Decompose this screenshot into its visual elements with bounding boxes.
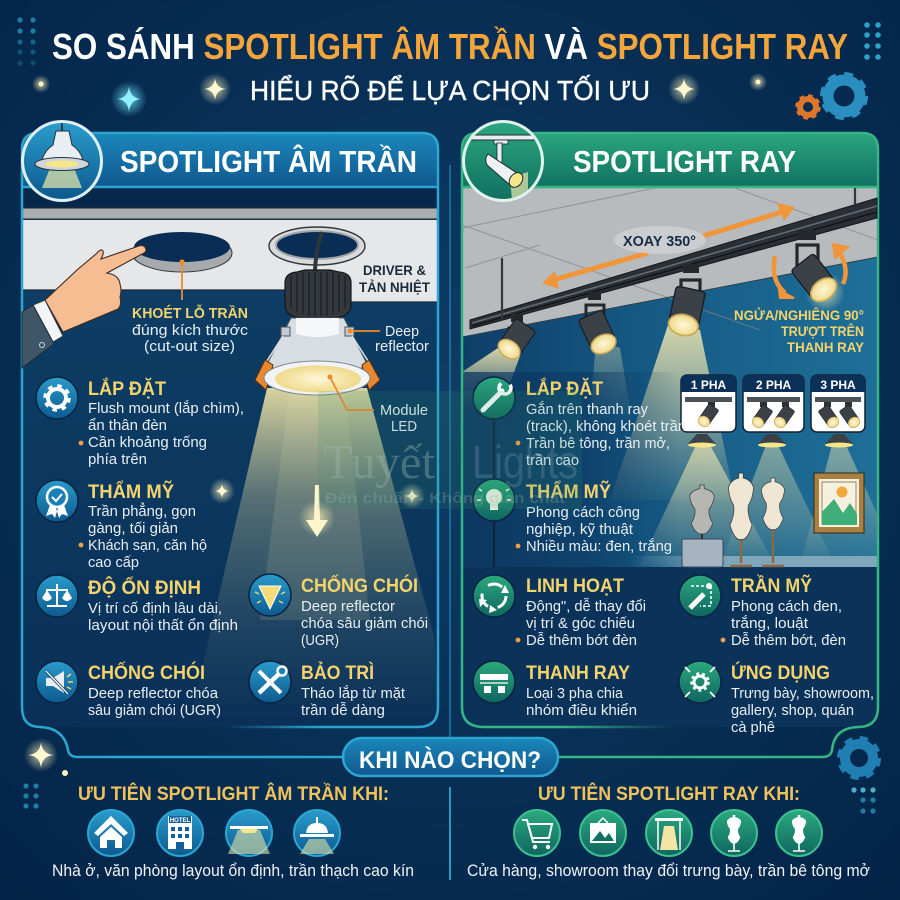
left features [36, 377, 428, 719]
feature: tham my: THẨM MỸ [88, 481, 174, 503]
feature: thanh ray: THANH RAY [526, 663, 630, 684]
bottom divider [449, 787, 451, 880]
track rail [470, 198, 877, 329]
heading: spotlight am tran: SPOTLIGHT ÂM TRẦN [120, 143, 417, 179]
feature: lap dat: Flush mount (lắp chìm), [88, 400, 244, 417]
framed picture [814, 466, 864, 533]
mannequin cream [728, 473, 754, 566]
watermark [318, 391, 582, 509]
feature: lap dat track: trần cao [526, 453, 579, 469]
card: 1 pha: 1 PHA [691, 378, 727, 392]
center divider [449, 165, 451, 740]
pendant lamps [688, 434, 853, 448]
panel: spotlight am tran [22, 133, 438, 757]
feature: ung dung: ỨNG DỤNG [731, 662, 830, 684]
feature: lap dat track: (track), không khoét trần [526, 419, 686, 435]
card: 1 pha [681, 375, 736, 432]
feature: thanh ray: nhóm điều khiển [526, 703, 637, 719]
lamp beam [190, 388, 438, 720]
feature: lap dat track [473, 377, 686, 469]
pedestal [682, 539, 723, 567]
icon: orange gear [797, 96, 819, 118]
card: 2 pha [743, 375, 804, 432]
feature: linh hoat: LINH HOẠT [526, 576, 624, 597]
icon: blue gear [823, 75, 865, 117]
callout: module led [328, 374, 428, 435]
decorative dots and sparkles top [17, 17, 881, 117]
subtitle: HIỂU RÕ ĐỂ LỰA CHỌN TỐI ƯU [250, 74, 650, 106]
feature: lap dat: ẩn thân đèn [88, 418, 167, 434]
feature: tham my: Khách sạn, căn hộ [88, 538, 207, 554]
icon: pointing hand [22, 246, 146, 368]
callout: cut-out size [132, 259, 248, 355]
phase cards [681, 375, 865, 432]
feature: tham my track: nghiệp, kỹ thuật [526, 522, 633, 538]
callout: driver [359, 262, 430, 295]
icon: house [88, 810, 134, 856]
feature: ung dung [679, 661, 874, 736]
heat sink driver [285, 270, 351, 318]
feature: bao tri: BẢO TRÌ [301, 662, 374, 684]
dark text backdrop [462, 372, 680, 567]
feature: linh hoat [473, 575, 646, 649]
feature: do on dinh: Vị trí cố định lâu dài, [88, 601, 222, 617]
arrows: tilt [774, 244, 848, 298]
card: 3 pha: 3 PHA [820, 378, 856, 392]
feature: chong choi right: (UGR) [301, 633, 339, 649]
pill: khi nao chon: KHI NÀO CHỌN? [359, 746, 541, 774]
feature: do on dinh: layout nội thất ổn định [88, 618, 238, 634]
watermark: Lights [472, 436, 578, 488]
spotlight three [667, 264, 706, 338]
callout: cut-out size: đúng kích thước [132, 323, 248, 339]
spring clips [255, 360, 273, 390]
header band left [22, 133, 438, 187]
callout: cut-out size: KHOÉT LỖ TRẦN [132, 304, 248, 322]
feature: bao tri [249, 661, 405, 719]
light arrow [299, 485, 335, 537]
feature: tham my track: Phong cách công [526, 505, 640, 521]
feature: tham my track: Nhiều màu: đen, trắng [526, 538, 672, 555]
callout: driver: DRIVER & [363, 262, 426, 278]
callout: deep reflector: reflector [375, 339, 429, 355]
feature: ung dung: gallery, shop, quán [731, 703, 854, 719]
concrete ceiling [462, 188, 878, 337]
reflector body [265, 318, 369, 368]
icon: track light badge [462, 120, 544, 202]
feature: tran my: trắng, louật [731, 615, 808, 632]
feature: lap dat track: LẮP ĐẶT [526, 378, 603, 400]
callout: cut-out size: (cut-out size) [144, 339, 235, 355]
recessed downlight [255, 232, 380, 395]
heading: ƯU TIÊN SPOTLIGHT RAY KHI: [538, 783, 800, 805]
feature: tham my track: THẨM MỸ [526, 481, 611, 503]
feature: chong choi left [36, 661, 221, 719]
label: xoay 350: XOAY 350° [623, 234, 696, 250]
suspension rods [502, 188, 855, 318]
ceiling cutout scene [22, 188, 438, 302]
feature: tham my: Trần phẳng, gọn [88, 502, 196, 520]
title: SO SÁNH SPOTLIGHT ÂM TRẦN VÀ SPOTLIGHT RAY [52, 25, 848, 67]
watermark: Tuyết [323, 436, 436, 489]
card: 3 pha [811, 375, 865, 432]
bottom decor [23, 738, 876, 814]
section: choose recessed [52, 783, 414, 880]
feature: bao tri: trần dễ dàng [301, 702, 385, 719]
feature: chong choi left: CHỐNG CHÓI [88, 662, 205, 684]
icon: gallery spot [646, 810, 692, 856]
icon: recessed light [226, 810, 272, 856]
arrows: slide direction [542, 203, 795, 289]
spotlight one [495, 314, 536, 363]
lens ring [264, 361, 370, 395]
feature: chong choi left: Deep reflector chóa [88, 686, 219, 702]
feature: lap dat track: Trần bê tông, trần mở, [526, 436, 670, 452]
icon: cart [514, 810, 560, 856]
showroom wall [462, 250, 878, 568]
light beams [462, 325, 880, 565]
feature: linh hoat: Động", dễ thay đổi [526, 598, 646, 615]
label: tilt and slide: THANH RAY [787, 339, 865, 355]
panel: spotlight ray [462, 133, 880, 757]
feature: lap dat: LẮP ĐẶT [88, 378, 166, 400]
callout: deep reflector [348, 324, 429, 355]
feature: tran my: TRẦN MỸ [731, 575, 812, 597]
feature: chong choi right: chóa sâu giảm chói [301, 616, 428, 632]
feature: tham my [36, 480, 207, 571]
feature: lap dat track: Gắn trên thanh ray [526, 401, 649, 418]
ceiling hole two [269, 227, 365, 265]
feature: tran my: Phong cách đen, [731, 599, 842, 615]
feature: tham my track [473, 479, 672, 555]
label: xoay 350 [614, 226, 706, 254]
label: tilt and slide: TRƯỢT TRÊN [781, 322, 864, 339]
icon: recessed lamp badge [21, 120, 103, 202]
cable [315, 232, 322, 270]
feature: linh hoat: Dễ thêm bớt đèn [526, 632, 637, 649]
label: tilt and slide: NGỬA/NGHIÊNG 90° [734, 306, 864, 323]
feature: tran my: Dễ thêm bớt, đèn [731, 632, 846, 649]
display mannequins [682, 473, 785, 567]
heading: spotlight ray: SPOTLIGHT RAY [573, 144, 796, 179]
feature: tham my: cao cấp [88, 555, 139, 571]
callout: driver: TẢN NHIỆT [359, 278, 430, 295]
heading: ƯU TIÊN SPOTLIGHT ÂM TRẦN KHI: [78, 783, 389, 805]
caption: Cửa hàng, showroom thay đổi trưng bày, trần bê tông mở [467, 862, 870, 880]
feature: chong choi right: Deep reflector [301, 599, 395, 615]
spotlight two [578, 292, 619, 358]
feature: chong choi left: sâu giảm chói (UGR) [88, 703, 221, 719]
mannequin cream right [761, 478, 785, 566]
label: tilt and slide [734, 306, 865, 355]
feature: ung dung: Trưng bày, showroom, [731, 686, 874, 702]
mannequin grey [690, 485, 714, 539]
callout: deep reflector: Deep [385, 324, 419, 340]
feature: tham my: gàng, tối giản [88, 521, 178, 537]
feature: do on dinh [36, 575, 238, 634]
feature: ung dung: cà phê [731, 720, 775, 736]
watermark: Đèn chuẩn - Không gian chất [325, 490, 565, 507]
icon: bottom gear [840, 739, 878, 777]
feature: thanh ray: Loại 3 pha chia [526, 686, 624, 702]
feature: do on dinh: ĐỘ ỔN ĐỊNH [88, 577, 201, 599]
callout: module led: LED [391, 419, 417, 435]
icon: mannequin [711, 810, 757, 856]
feature: lap dat: Cần khoảng trống [88, 435, 207, 451]
pill: khi nao chon [343, 738, 558, 776]
caption: Nhà ở, văn phòng layout ổn định, trần thạch cao kín [52, 862, 414, 880]
floor [630, 556, 878, 567]
icon: hotel: HOTEL [170, 818, 190, 824]
icon: mannequin two [776, 810, 822, 856]
ceiling hole one [132, 232, 232, 272]
sparkles in panel [209, 478, 425, 509]
feature: tran my [679, 575, 846, 649]
feature: lap dat: phía trên [88, 452, 147, 468]
spotlight four [791, 230, 845, 312]
section: choose track [467, 783, 870, 880]
feature: bao tri: Tháo lắp từ mặt [301, 685, 405, 702]
feature: linh hoat: vị trí & góc chiếu [526, 616, 635, 632]
feature: thanh ray [473, 661, 637, 719]
card: 2 pha: 2 PHA [756, 378, 792, 392]
feature: lap dat [36, 377, 244, 468]
icon: pendant light [294, 810, 340, 856]
feature: chong choi right [249, 574, 428, 649]
feature: chong choi right: CHỐNG CHÓI [301, 575, 418, 597]
icon: picture [580, 810, 626, 856]
callout: module led: Module [380, 403, 428, 419]
right features [473, 377, 874, 736]
icon: hotel [157, 810, 203, 856]
